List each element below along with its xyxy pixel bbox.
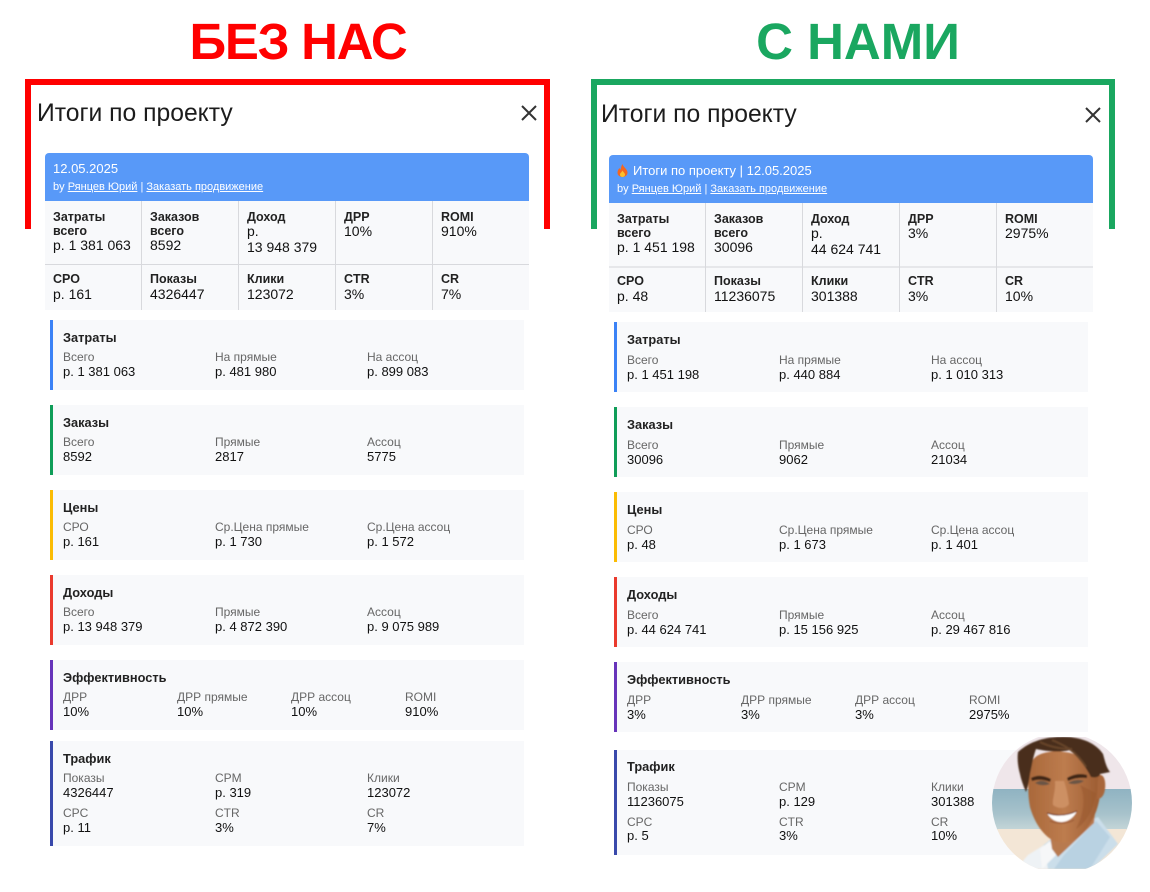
section: трафик: Показы	[63, 771, 104, 785]
section: затраты: На ассоц	[931, 353, 982, 367]
section: заказы: 30096	[627, 452, 663, 467]
section: затраты: На ассоц	[367, 350, 418, 364]
section: затраты: р. 1 010 313	[931, 367, 1003, 382]
section: эффективность: ДРР ассоц	[291, 690, 351, 704]
blue header: by Рянцев Юрий | Заказать продвижение	[617, 183, 827, 195]
section: доходы: р. 15 156 925	[779, 622, 859, 637]
section: эффективность	[50, 660, 524, 730]
section: доходы: р. 44 624 741	[627, 622, 707, 637]
section: эффективность: 2975%	[969, 707, 1009, 722]
section: цены: Цены	[63, 500, 98, 515]
section: цены: р. 1 572	[367, 534, 414, 549]
summary table: р. 48	[617, 288, 648, 304]
section: цены: р. 161	[63, 534, 99, 549]
summary table: р.	[247, 223, 259, 239]
section: цены: СРО	[63, 520, 89, 534]
summary table: Затраты всего	[53, 210, 105, 238]
section: затраты: Затраты	[63, 330, 117, 345]
section: эффективность: 3%	[627, 707, 646, 722]
section: трафик: 3%	[779, 828, 798, 843]
section: трафик: CR	[367, 806, 384, 820]
section: трафик: 3%	[215, 820, 234, 835]
section: эффективность: 10%	[177, 704, 203, 719]
section: доходы: Прямые	[215, 605, 260, 619]
section: эффективность: ДРР прямые	[741, 693, 812, 707]
section: трафик: р. 11	[63, 820, 91, 835]
panel title: Итоги по проекту	[601, 101, 797, 128]
red frame	[25, 79, 550, 229]
section: заказы: 21034	[931, 452, 967, 467]
summary table: 2975%	[1005, 225, 1049, 241]
section: затраты	[50, 320, 524, 390]
summary table: Затраты всего	[617, 212, 669, 240]
panel: с нами	[601, 101, 1101, 855]
summary table: 301388	[811, 288, 858, 304]
summary table: 4326447	[150, 286, 205, 302]
panel title: Итоги по проекту	[37, 100, 233, 127]
ear	[1097, 775, 1105, 799]
section: трафик: CPC	[63, 806, 88, 820]
section: эффективность	[614, 662, 1088, 732]
section: затраты: На прямые	[215, 350, 277, 364]
section: эффективность: ROMI	[405, 690, 436, 704]
summary table: р. 1 381 063	[53, 237, 131, 253]
section: эффективность: ДРР	[627, 693, 651, 707]
eyes	[1035, 781, 1050, 785]
summary table: Доход	[811, 212, 849, 226]
section: заказы	[50, 405, 524, 475]
neck and shirt	[1044, 817, 1118, 869]
summary table: Доход	[247, 210, 285, 224]
section: трафик: CTR	[779, 815, 804, 829]
section: эффективность: ROMI	[969, 693, 1000, 707]
section: трафик	[614, 750, 1088, 855]
summary table: 11236075	[714, 288, 775, 304]
section: затраты: Всего	[627, 353, 658, 367]
section: цены: СРО	[627, 523, 653, 537]
section: доходы	[50, 575, 524, 645]
summary table: 3%	[908, 288, 928, 304]
summary table: 123072	[247, 286, 294, 302]
blue header: Итоги по проекту | 12.05.2025	[633, 163, 812, 178]
section: трафик: р. 319	[215, 785, 251, 800]
section: заказы: Прямые	[215, 435, 260, 449]
section: цены: р. 48	[627, 537, 656, 552]
section: эффективность: 3%	[855, 707, 874, 722]
section: трафик: CPC	[627, 815, 652, 829]
section: доходы: Всего	[63, 605, 94, 619]
face	[1028, 751, 1100, 843]
summary table: Заказов всего	[714, 212, 763, 240]
summary table: СРО	[53, 272, 80, 286]
heading: с нами: С НАМИ	[756, 13, 960, 70]
section: трафик: р. 129	[779, 794, 815, 809]
heading: без нас: БЕЗ НАС	[190, 13, 406, 70]
section: трафик: Показы	[627, 780, 668, 794]
section: трафик: 7%	[367, 820, 386, 835]
section: доходы: Всего	[627, 608, 658, 622]
section: затраты: Затраты	[627, 332, 681, 347]
summary table: Показы	[714, 274, 761, 288]
section: трафик: Клики	[367, 771, 400, 785]
section: трафик: CPM	[779, 780, 806, 794]
summary table: CTR	[344, 272, 370, 286]
brows	[1031, 776, 1051, 782]
hair	[1018, 737, 1110, 792]
green frame	[591, 79, 1115, 229]
summary table: 3%	[908, 225, 928, 241]
section: заказы: 9062	[779, 452, 808, 467]
section: цены: Ср.Цена ассоц	[367, 520, 450, 534]
section: цены	[50, 490, 524, 560]
summary table: CTR	[908, 274, 934, 288]
section: эффективность: Эффективность	[63, 670, 166, 685]
section: цены	[614, 492, 1088, 562]
summary table: Заказов всего	[150, 210, 199, 238]
summary table: 910%	[441, 223, 477, 239]
summary table: 30096	[714, 239, 753, 255]
section: доходы: Доходы	[627, 587, 677, 602]
summary table: р.	[811, 225, 823, 241]
section: заказы: 5775	[367, 449, 396, 464]
summary table: СРО	[617, 274, 644, 288]
section: трафик: Трафик	[627, 759, 675, 774]
section: цены: Цены	[627, 502, 662, 517]
section: заказы: 2817	[215, 449, 244, 464]
summary table: 7%	[441, 286, 461, 302]
section: трафик: CPM	[215, 771, 242, 785]
section: заказы: Всего	[63, 435, 94, 449]
section: эффективность: 910%	[405, 704, 438, 719]
section: затраты: р. 899 083	[367, 364, 428, 379]
section: затраты: Всего	[63, 350, 94, 364]
section: доходы: р. 9 075 989	[367, 619, 439, 634]
summary table: ДРР	[908, 212, 934, 226]
section: трафик: CR	[931, 815, 948, 829]
summary table: ROMI	[1005, 212, 1038, 226]
section: заказы: Ассоц	[367, 435, 401, 449]
summary table: 8592	[150, 237, 181, 253]
summary table: 10%	[1005, 288, 1033, 304]
section: трафик: Клики	[931, 780, 964, 794]
section: трафик: 123072	[367, 785, 410, 800]
section: эффективность: ДРР ассоц	[855, 693, 915, 707]
section: затраты: р. 440 884	[779, 367, 840, 382]
summary table: CR	[1005, 274, 1023, 288]
summary table	[45, 201, 529, 310]
section: трафик: Трафик	[63, 751, 111, 766]
section: заказы: 8592	[63, 449, 92, 464]
close icon	[521, 105, 537, 121]
section: заказы: Заказы	[63, 415, 109, 430]
summary table: р. 1 451 198	[617, 239, 695, 255]
nose	[1053, 781, 1069, 808]
panel: без нас	[37, 100, 537, 846]
section: заказы: Заказы	[627, 417, 673, 432]
section: трафик: 4326447	[63, 785, 114, 800]
section: цены: Ср.Цена прямые	[779, 523, 873, 537]
section: доходы	[614, 577, 1088, 647]
summary table: Клики	[247, 272, 284, 286]
close icon	[1085, 107, 1101, 123]
section: эффективность: 3%	[741, 707, 760, 722]
section: заказы: Всего	[627, 438, 658, 452]
section: цены: р. 1 673	[779, 537, 826, 552]
section: доходы: р. 29 467 816	[931, 622, 1011, 637]
section: эффективность: 10%	[63, 704, 89, 719]
section: заказы: Прямые	[779, 438, 824, 452]
cheek shadow	[1078, 786, 1088, 827]
section: эффективность: ДРР прямые	[177, 690, 248, 704]
summary table: 10%	[344, 223, 372, 239]
section: заказы	[614, 407, 1088, 477]
blue header: 12.05.2025	[53, 161, 118, 176]
section: доходы: р. 4 872 390	[215, 619, 287, 634]
section: трафик	[50, 741, 524, 846]
summary table	[609, 203, 1093, 312]
section: цены: р. 1 401	[931, 537, 978, 552]
section: заказы: Ассоц	[931, 438, 965, 452]
mouth	[1047, 811, 1077, 822]
section: эффективность: 10%	[291, 704, 317, 719]
summary table: CR	[441, 272, 459, 286]
section: затраты: р. 1 381 063	[63, 364, 135, 379]
blue header: by Рянцев Юрий | Заказать продвижение	[53, 181, 263, 193]
section: доходы: р. 13 948 379	[63, 619, 143, 634]
section: доходы: Ассоц	[931, 608, 965, 622]
section: трафик: 11236075	[627, 794, 684, 809]
summary table: 13 948 379	[247, 239, 317, 255]
photo: smiling man on beach	[992, 737, 1132, 869]
section: трафик: CTR	[215, 806, 240, 820]
summary table: ROMI	[441, 210, 474, 224]
section: доходы: Доходы	[63, 585, 113, 600]
section: затраты: р. 1 451 198	[627, 367, 699, 382]
section: затраты	[614, 322, 1088, 392]
blue header	[45, 153, 529, 201]
summary table: ДРР	[344, 210, 370, 224]
section: цены: р. 1 730	[215, 534, 262, 549]
summary table: р. 161	[53, 286, 92, 302]
section: затраты: На прямые	[779, 353, 841, 367]
section: эффективность: ДРР	[63, 690, 87, 704]
section: цены: Ср.Цена прямые	[215, 520, 309, 534]
summary table: Клики	[811, 274, 848, 288]
summary table: Показы	[150, 272, 197, 286]
section: цены: Ср.Цена ассоц	[931, 523, 1014, 537]
section: трафик: 301388	[931, 794, 974, 809]
blue header	[609, 155, 1093, 203]
section: эффективность: Эффективность	[627, 672, 730, 687]
section: трафик: 10%	[931, 828, 957, 843]
summary table: 44 624 741	[811, 241, 881, 257]
summary table: 3%	[344, 286, 364, 302]
section: доходы: Прямые	[779, 608, 824, 622]
section: доходы: Ассоц	[367, 605, 401, 619]
section: затраты: р. 481 980	[215, 364, 276, 379]
section: трафик: р. 5	[627, 828, 649, 843]
